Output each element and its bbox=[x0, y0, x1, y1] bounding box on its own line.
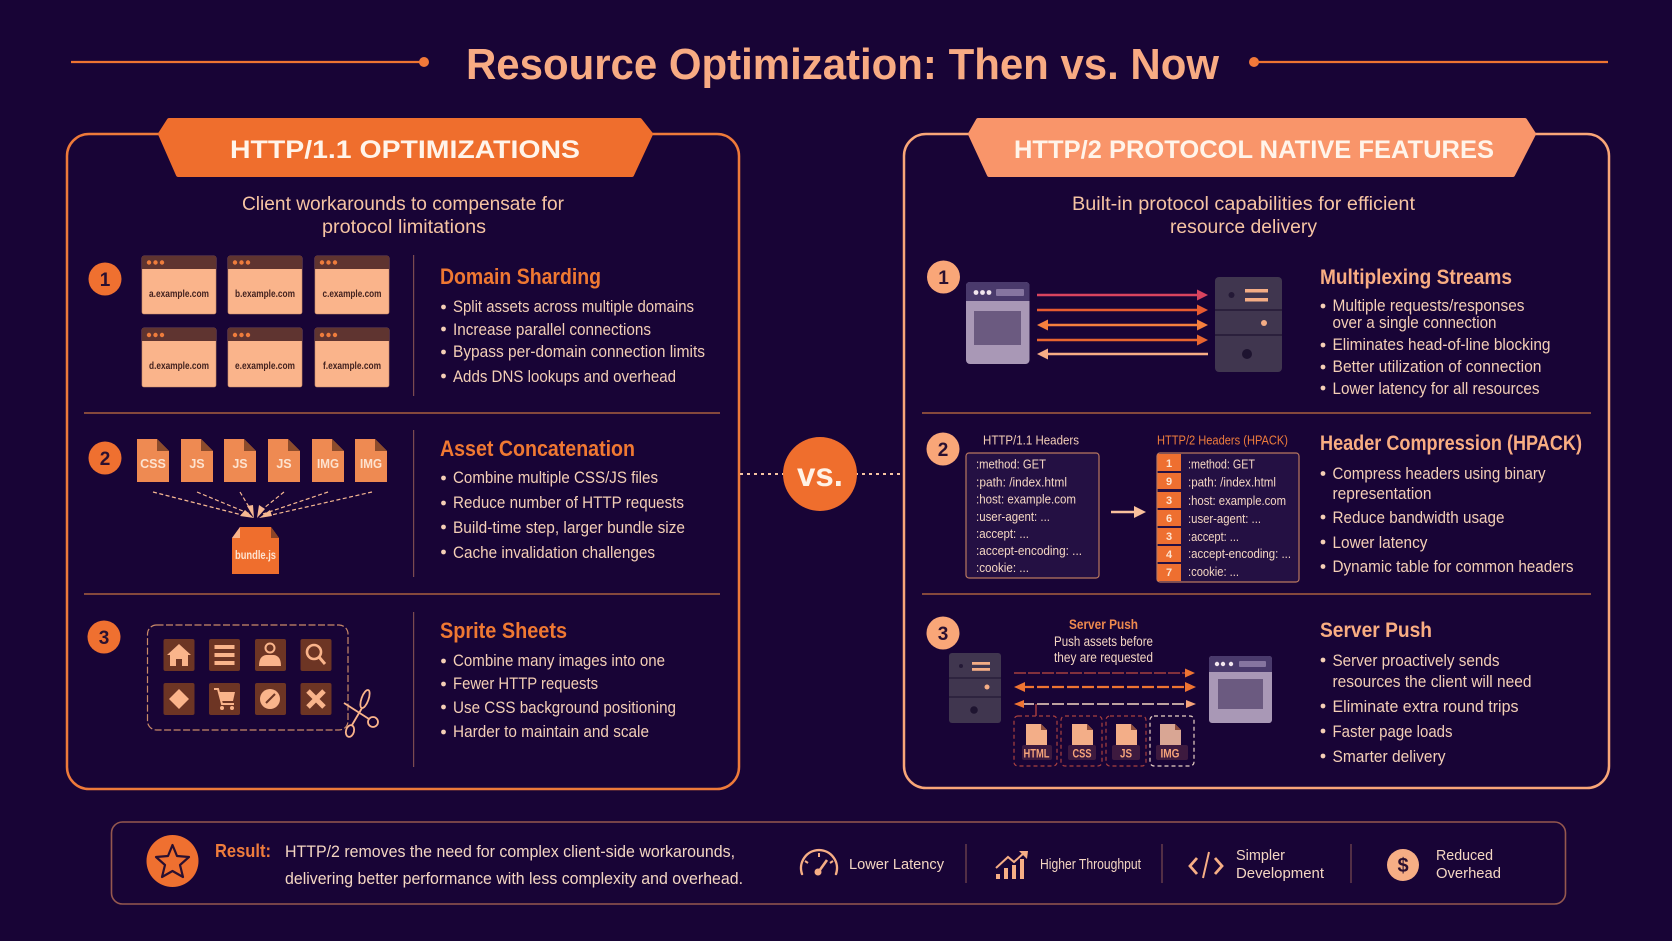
result bar bbox=[112, 822, 1566, 904]
domain shard windows: e.example.com bbox=[235, 360, 295, 372]
text: multiplexing streams: Eliminates head-of-line blocking bbox=[1332, 336, 1550, 354]
HTTP/1.1 headers table: :method: GET bbox=[976, 458, 1046, 472]
text: asset concatenation: Build-time step, larger bundle size bbox=[453, 519, 685, 537]
text: header compression: Compress headers using binary bbox=[1332, 465, 1546, 483]
HPACK headers table: 9 bbox=[1166, 476, 1172, 488]
result text bbox=[215, 841, 743, 888]
result text: HTTP/2 removes the need for complex client-side workarounds, bbox=[285, 843, 735, 861]
domain shard windows: d.example.com bbox=[149, 360, 209, 372]
panel heading: HTTP/2: HTTP/2 PROTOCOL NATIVE FEATURES bbox=[1014, 136, 1494, 164]
vs badge bbox=[740, 437, 903, 511]
arrows converging on bundle bbox=[153, 492, 372, 518]
browser icon bbox=[966, 282, 1030, 364]
text: multiplexing streams: Better utilization of connection bbox=[1332, 358, 1542, 376]
pushed asset files: JS bbox=[1120, 746, 1132, 760]
vs badge: vs. bbox=[797, 456, 843, 493]
source files: CSS bbox=[140, 457, 166, 471]
pushed asset files: HTML bbox=[1024, 746, 1050, 760]
domain shard windows bbox=[142, 256, 389, 387]
text: sprite sheets: Harder to maintain and scale bbox=[453, 723, 649, 741]
text: server push bbox=[1320, 619, 1532, 766]
step badge 1 bbox=[927, 260, 960, 294]
HTTP/1.1 headers table: :accept: ... bbox=[976, 527, 1029, 541]
HPACK headers table bbox=[1157, 434, 1299, 582]
text: domain sharding: Increase parallel connections bbox=[453, 321, 651, 339]
subtitle: protocol limitations bbox=[322, 217, 486, 238]
result text: delivering better performance with less complexity and overhead. bbox=[285, 870, 743, 888]
pushed asset files: IMG bbox=[1160, 746, 1180, 760]
text: server push: Faster page loads bbox=[1332, 723, 1452, 741]
bundle file: bundle.js bbox=[235, 548, 276, 562]
result text: Result: bbox=[215, 841, 271, 861]
multiplexed arrows bbox=[1037, 290, 1208, 360]
step badge 3: 3 bbox=[938, 624, 948, 645]
panel: HTTP/2 native features bbox=[904, 120, 1609, 788]
benefit: simpler development: Simpler bbox=[1236, 847, 1285, 864]
pushed asset files: CSS bbox=[1072, 746, 1092, 760]
subtitle: resource delivery bbox=[1170, 217, 1318, 238]
text: sprite sheets: Fewer HTTP requests bbox=[453, 675, 598, 693]
text: domain sharding: Split assets across multiple domains bbox=[453, 298, 694, 316]
text: multiplexing streams: Multiplexing Streams bbox=[1320, 266, 1512, 289]
text: server push: Eliminate extra round trips bbox=[1332, 698, 1518, 716]
text: sprite sheets: Sprite Sheets bbox=[440, 618, 567, 643]
browser icon bbox=[1209, 656, 1272, 723]
HPACK headers table: 1 bbox=[1166, 458, 1172, 470]
subtitle bbox=[242, 194, 565, 238]
HPACK headers table: :method: GET bbox=[1188, 458, 1255, 472]
push arrows bbox=[1014, 668, 1196, 716]
pushed asset files bbox=[1014, 716, 1194, 766]
step badge 1: 1 bbox=[938, 268, 949, 289]
text: server push: Server Push bbox=[1320, 619, 1432, 642]
text: header compression: Dynamic table for common headers bbox=[1332, 558, 1574, 576]
domain shard windows: a.example.com bbox=[149, 288, 209, 300]
sprite sheet bbox=[148, 625, 348, 730]
text: asset concatenation: Reduce number of HTTP requests bbox=[453, 494, 684, 512]
benefit: simpler development: Development bbox=[1236, 865, 1325, 882]
text: sprite sheets bbox=[440, 618, 676, 741]
source files bbox=[137, 439, 387, 482]
text: server push: Server proactively sends bbox=[1332, 652, 1500, 670]
HPACK headers table: 7 bbox=[1166, 567, 1172, 579]
step badge 3 bbox=[88, 620, 120, 654]
benefit: lower latency bbox=[801, 850, 944, 876]
HPACK headers table: :host: example.com bbox=[1188, 494, 1286, 508]
HTTP/1.1 headers table: :cookie: ... bbox=[976, 561, 1029, 575]
arrow: headers compressed bbox=[1111, 506, 1146, 518]
step badge 1 bbox=[88, 262, 122, 296]
text: header compression: Header Compression (HPACK) bbox=[1320, 432, 1582, 455]
server icon bbox=[949, 653, 1001, 723]
text: asset concatenation: Asset Concatenation bbox=[440, 436, 635, 461]
subtitle: Client workarounds to compensate for bbox=[242, 194, 565, 215]
text: asset concatenation: Cache invalidation challenges bbox=[453, 544, 655, 562]
step badge 3 bbox=[926, 616, 960, 650]
panel heading: HTTP/1.1 bbox=[160, 120, 651, 175]
text: asset concatenation: Combine multiple CSS/JS files bbox=[453, 469, 658, 487]
text: domain sharding: Bypass per-domain connection limits bbox=[453, 343, 705, 361]
HPACK headers table: :cookie: ... bbox=[1188, 565, 1239, 579]
benefit: reduced overhead: $ bbox=[1397, 855, 1409, 877]
HTTP/1.1 headers table: :user-agent: ... bbox=[976, 510, 1050, 524]
benefit: lower latency: Lower Latency bbox=[849, 856, 944, 873]
panel: HTTP/1.1 optimizations bbox=[67, 120, 739, 789]
title: Resource Optimization: Then vs. Now bbox=[466, 40, 1220, 89]
text: header compression: Reduce bandwidth usage bbox=[1332, 509, 1504, 527]
icon: star bbox=[146, 835, 198, 887]
server push caption: they are requested bbox=[1054, 650, 1153, 665]
benefit: reduced overhead: Overhead bbox=[1436, 865, 1501, 882]
text: domain sharding: Adds DNS lookups and overhead bbox=[453, 368, 676, 386]
HTTP/1.1 headers table: :host: example.com bbox=[976, 492, 1076, 506]
benefit: simpler development bbox=[1190, 847, 1325, 882]
text: header compression: Lower latency bbox=[1332, 534, 1428, 552]
HTTP/1.1 headers table: HTTP/1.1 Headers bbox=[983, 434, 1079, 448]
text: multiplexing streams: over a single connection bbox=[1332, 314, 1496, 332]
text: sprite sheets: Combine many images into one bbox=[453, 652, 665, 670]
HPACK headers table: 4 bbox=[1166, 549, 1173, 561]
text: asset concatenation bbox=[440, 436, 685, 562]
step badge 1: 1 bbox=[100, 270, 111, 291]
HTTP/1.1 headers table: :path: /index.html bbox=[976, 476, 1067, 490]
domain shard windows: c.example.com bbox=[322, 288, 382, 300]
title bbox=[71, 40, 1608, 89]
source files: JS bbox=[232, 457, 248, 471]
HPACK headers table: 6 bbox=[1166, 513, 1172, 525]
subtitle: Built-in protocol capabilities for efficient bbox=[1072, 194, 1416, 215]
text: domain sharding bbox=[440, 264, 705, 386]
step badge 2 bbox=[88, 442, 122, 474]
subtitle bbox=[1072, 194, 1416, 238]
text: header compression bbox=[1320, 432, 1582, 576]
step badge 2: 2 bbox=[938, 440, 948, 461]
HPACK headers table: :accept-encoding: ... bbox=[1188, 547, 1291, 561]
source files: IMG bbox=[360, 457, 382, 471]
benefit: higher throughput bbox=[996, 851, 1142, 879]
domain shard windows: b.example.com bbox=[235, 288, 295, 300]
bundle file bbox=[232, 527, 279, 574]
server push caption: Push assets before bbox=[1054, 634, 1153, 649]
panel heading: HTTP/2 bbox=[970, 120, 1534, 175]
step badge 2: 2 bbox=[100, 449, 110, 470]
HPACK headers table: :user-agent: ... bbox=[1188, 512, 1261, 526]
HPACK headers table: 3 bbox=[1166, 531, 1172, 543]
source files: JS bbox=[276, 457, 292, 471]
text: domain sharding: Domain Sharding bbox=[440, 264, 601, 289]
HTTP/1.1 headers table: :accept-encoding: ... bbox=[976, 544, 1082, 558]
text: server push: resources the client will need bbox=[1332, 673, 1532, 691]
text: multiplexing streams: Lower latency for all resources bbox=[1332, 380, 1540, 398]
HPACK headers table: 3 bbox=[1166, 495, 1172, 507]
server push caption: Server Push bbox=[1069, 617, 1138, 632]
text: sprite sheets: Use CSS background positioning bbox=[453, 699, 676, 717]
icon: scissors bbox=[344, 689, 378, 738]
text: server push: Smarter delivery bbox=[1332, 748, 1446, 766]
server icon bbox=[1215, 277, 1282, 372]
text: header compression: representation bbox=[1332, 485, 1432, 503]
HPACK headers table: HTTP/2 Headers (HPACK) bbox=[1157, 434, 1288, 448]
text: multiplexing streams bbox=[1320, 266, 1550, 398]
benefit: higher throughput: Higher Throughput bbox=[1040, 856, 1142, 873]
HPACK headers table: :accept: ... bbox=[1188, 530, 1239, 544]
step badge 2 bbox=[926, 432, 960, 466]
benefit: reduced overhead bbox=[1387, 847, 1501, 882]
source files: IMG bbox=[317, 457, 339, 471]
source files: JS bbox=[189, 457, 205, 471]
HTTP/1.1 headers table bbox=[966, 434, 1099, 578]
benefit: reduced overhead: Reduced bbox=[1436, 847, 1493, 864]
step badge 3: 3 bbox=[99, 628, 109, 649]
panel heading: HTTP/1.1: HTTP/1.1 OPTIMIZATIONS bbox=[230, 136, 580, 164]
text: multiplexing streams: Multiple requests/responses bbox=[1332, 297, 1524, 315]
HPACK headers table: :path: /index.html bbox=[1188, 476, 1276, 490]
domain shard windows: f.example.com bbox=[323, 360, 381, 372]
server push caption bbox=[1054, 617, 1153, 665]
